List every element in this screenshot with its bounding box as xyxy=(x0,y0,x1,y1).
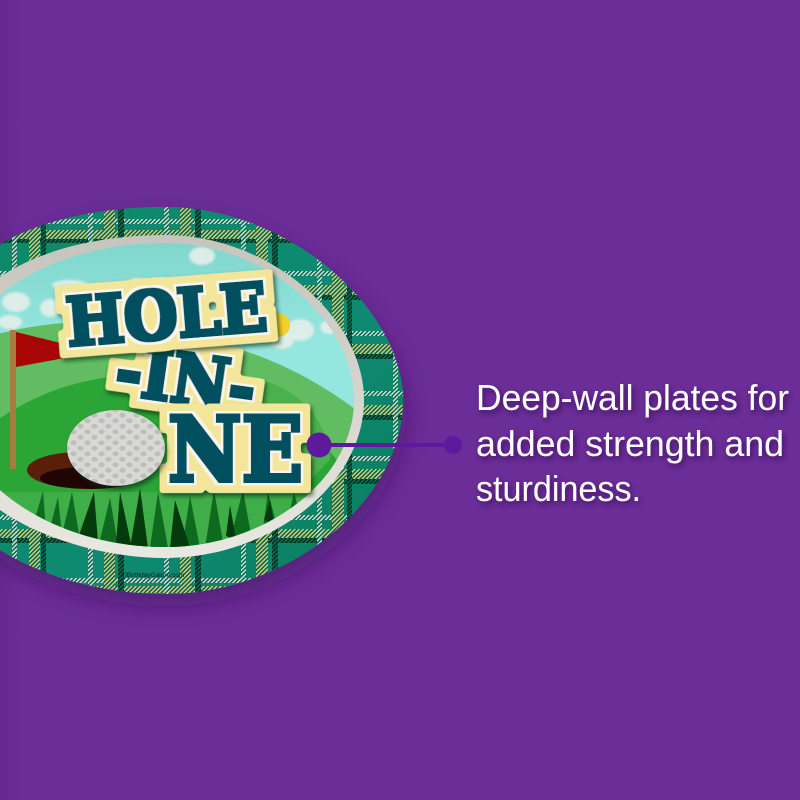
callout text: added strength and xyxy=(476,423,784,464)
grass blades xyxy=(34,490,300,548)
front hill xyxy=(0,377,337,547)
grass base xyxy=(2,492,310,547)
plaid rim xyxy=(0,200,410,600)
flag pole xyxy=(10,330,16,469)
sticker: NE: NE xyxy=(168,397,303,503)
callout text: sturdiness. xyxy=(476,468,641,509)
connector xyxy=(306,432,462,458)
white inner rim xyxy=(0,235,364,558)
sticker: HOLE: HOLE xyxy=(63,268,270,362)
callout text: Deep-wall plates for xyxy=(476,377,789,418)
flag xyxy=(10,330,97,469)
sticker: -IN-: -IN- xyxy=(111,331,261,429)
scene xyxy=(0,243,354,547)
red pennant xyxy=(16,332,97,367)
hole xyxy=(27,452,140,489)
clouds xyxy=(0,247,340,349)
plate xyxy=(0,200,410,600)
hill highlight xyxy=(262,382,330,478)
golf ball xyxy=(67,410,167,490)
back hills xyxy=(0,323,354,547)
plate shadow xyxy=(0,207,403,594)
sun xyxy=(276,313,290,337)
sky xyxy=(0,240,370,440)
callout text xyxy=(476,377,789,509)
copyright: ©BirthdayGalore.com xyxy=(122,571,184,579)
